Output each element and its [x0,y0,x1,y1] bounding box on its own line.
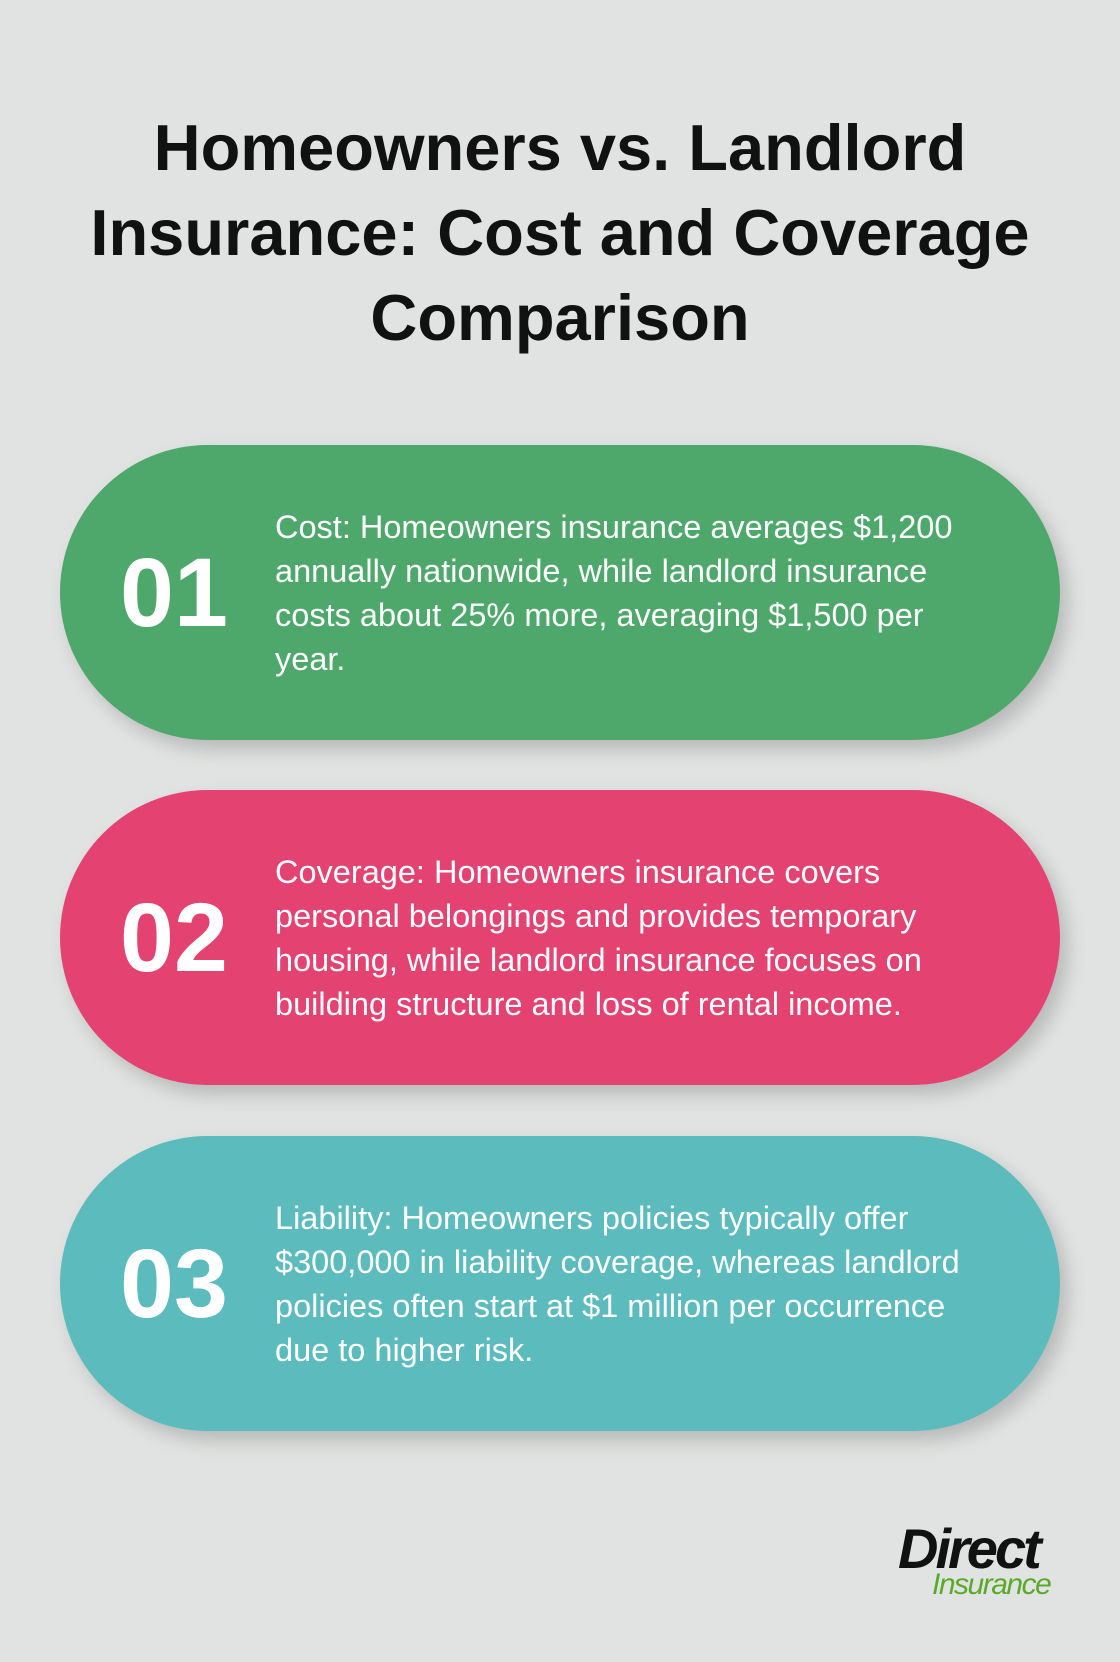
number 03: 03 [120,1229,228,1338]
text: coverage: building structure and loss of rental income. [275,986,902,1022]
text: liability: due to higher risk. [275,1332,533,1368]
text: cost: costs about 25% more, averaging $1,500 per [275,596,924,632]
text: cost [275,508,952,676]
text: liability: $300,000 in liability coverage, whereas landlord [275,1244,960,1280]
title: Homeowners vs. Landlord [154,111,966,184]
text: coverage [275,854,922,1022]
text: coverage: housing, while landlord insurance focuses on [275,942,922,978]
number 02: 02 [120,883,228,992]
panel: liability [60,1136,1060,1431]
title [90,111,1030,354]
number 01: 01 [120,538,228,647]
text: coverage: Coverage: Homeowners insurance covers [275,854,880,890]
logo [898,1517,1051,1601]
text: coverage: personal belongings and provides temporary [275,898,916,934]
logo: Direct [898,1517,1039,1580]
logo: Insurance [932,1568,1050,1601]
panel: cost [60,445,1060,740]
text: liability: Liability: Homeowners policies typically offer [275,1200,908,1236]
title: Comparison [370,281,750,354]
text: cost: Cost: Homeowners insurance averages $1,200 [275,508,952,544]
text: cost: year. [275,640,345,676]
text: liability [275,1200,960,1368]
text: cost: annually nationwide, while landlord insurance [275,552,927,588]
title: Insurance: Cost and Coverage [90,196,1030,269]
panel: coverage [60,790,1060,1085]
text: liability: policies often start at $1 million per occurrence [275,1288,945,1324]
